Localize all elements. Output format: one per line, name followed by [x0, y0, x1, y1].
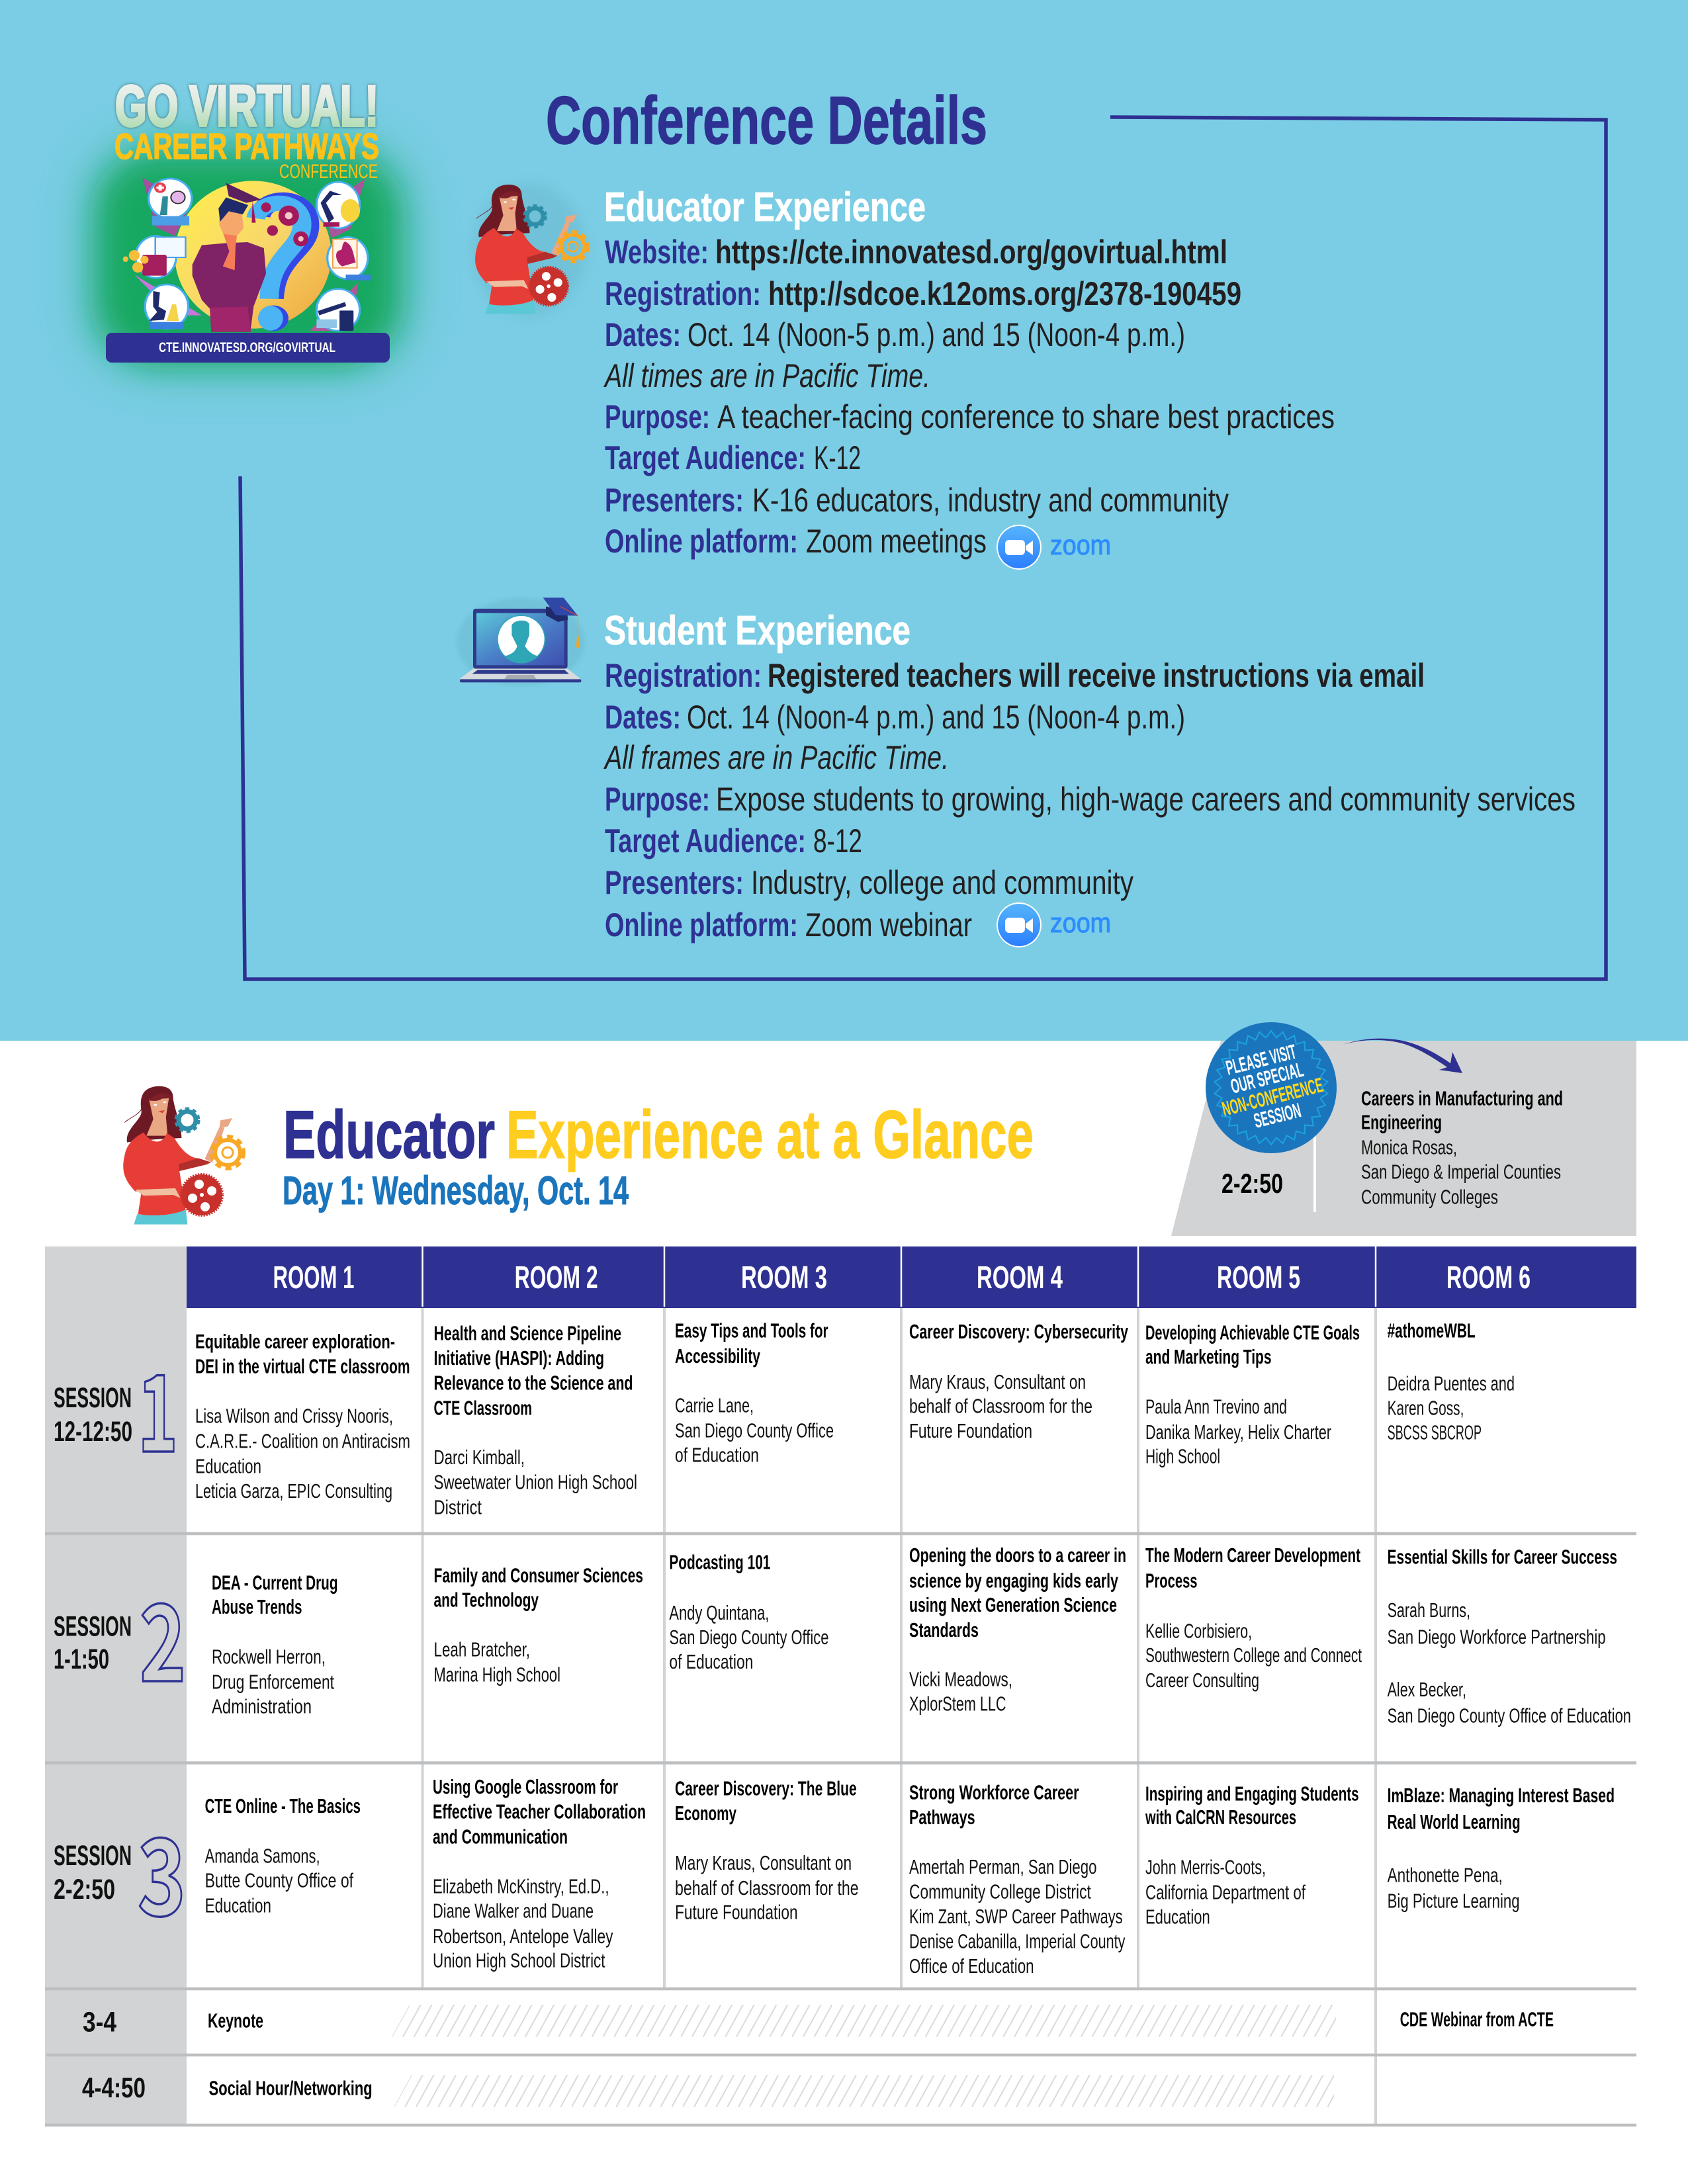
text block: student experience: Online platform: [605, 906, 798, 943]
text block: non-conference session details: Community Colleges [1361, 1186, 1498, 1208]
session 2 label: 1-1:50 [54, 1643, 109, 1675]
text block: non-conference session details: Monica Rosas, [1361, 1135, 1457, 1159]
session 2 room 2: and Technology [434, 1588, 539, 1612]
session 2 room 4: Vicki Meadows, [909, 1667, 1012, 1691]
session 3 label: 3 [138, 1793, 186, 1946]
heading: Educator Experience at a Glance [283, 1097, 1034, 1172]
session 2 room 6: Alex Becker, [1388, 1678, 1466, 1701]
session 3 room 2: and Communication [433, 1825, 568, 1849]
session 3 label: 2-2:50 [54, 1874, 115, 1905]
session 3 room 4: Pathways [909, 1806, 975, 1829]
frame: conference details outline [240, 117, 1606, 979]
session 1 room 2: Relevance to the Science and [434, 1371, 633, 1395]
session 3 room 2: Robertson, Antelope Valley [433, 1925, 613, 1948]
session 3 room 1 [205, 1794, 361, 1917]
session 2 room 4: science by engaging kids early [909, 1569, 1119, 1592]
session 3 room 6: Real World Learning [1388, 1810, 1521, 1833]
text block: student experience: Registration: [605, 657, 762, 694]
icon: woman with gears (educator) [473, 184, 588, 316]
session 1 label: 1 [138, 1329, 178, 1483]
badge: please visit: SESSION [1251, 1098, 1304, 1133]
session 2 room 5: Southwestern College and Connect [1145, 1643, 1362, 1667]
text block: educator experience: Presenters: [605, 482, 744, 519]
session 3 room 1: Butte County Office of [205, 1868, 353, 1892]
session 3 room 2: Elizabeth McKinstry, Ed.D., [433, 1875, 609, 1898]
keynote row: Keynote [208, 2009, 263, 2032]
session 3 room 4: Denise Cabanilla, Imperial County [909, 1929, 1126, 1953]
session 3 label [54, 1793, 186, 1946]
session 1 room 2: CTE Classroom [434, 1396, 532, 1420]
session 1 room 3: San Diego County Office [675, 1419, 834, 1442]
badge: please visit: PLEASE VISIT [1223, 1040, 1299, 1080]
session 3 room 2 [433, 1775, 646, 1972]
text block: educator experience: Target Audience: [605, 439, 806, 476]
session 2 room 3 [669, 1551, 828, 1673]
session 1 room 1: DEI in the virtual CTE classroom [195, 1355, 410, 1377]
panel: non-conference session [1171, 1022, 1636, 1236]
session 3 room 4: Community College District [909, 1880, 1091, 1903]
session 1 room 1: C.A.R.E.- Coalition on Antiracism [195, 1429, 410, 1453]
logo subtitle: Conference: CONFERENCE [279, 161, 378, 183]
icon: woman with gears (at a glance) [123, 1086, 244, 1225]
text block: non-conference session details: Engineering [1361, 1110, 1442, 1134]
session 1 room 3: Easy Tips and Tools for [675, 1319, 828, 1342]
session 1 room 5: Developing Achievable CTE Goals [1145, 1321, 1360, 1344]
logo subtitle: Career Pathways: CAREER PATHWAYS [114, 126, 379, 167]
session 1 room 1 [195, 1330, 410, 1503]
text block: student experience [603, 608, 1576, 943]
session 3 room 5: John Merris-Coots, [1145, 1855, 1266, 1879]
text block: educator experience: K-12 [814, 439, 861, 476]
header: room 4: ROOM 4 [977, 1260, 1063, 1295]
session 1 room 1: Equitable career exploration- [195, 1330, 395, 1353]
badge: please visit: NON-CONFERENCE [1220, 1073, 1325, 1121]
text block: educator experience: K-16 educators, industry and community [752, 482, 1229, 519]
session 2 room 6 [1388, 1546, 1631, 1727]
session 2 room 1: Abuse Trends [212, 1595, 302, 1618]
session 3 room 3: Mary Kraus, Consultant on [675, 1851, 852, 1874]
header: room 2: ROOM 2 [515, 1260, 598, 1295]
session 1 room 2: Sweetwater Union High School [434, 1470, 637, 1494]
session 2 label: SESSION [54, 1611, 132, 1643]
session 2 room 2 [434, 1564, 643, 1686]
session 2 room 4: using Next Generation Science [909, 1593, 1117, 1616]
arrow: to session [1343, 1039, 1462, 1073]
session 1 room 4: behalf of Classroom for the [909, 1395, 1092, 1417]
icon: laptop with graduate [457, 597, 584, 686]
text block: non-conference session details [1361, 1086, 1563, 1208]
session 2 room 3: Podcasting 101 [669, 1551, 770, 1573]
text block: non-conference session details: Careers in Manufacturing and [1361, 1086, 1563, 1110]
text block: educator experience: Oct. 14 (Noon-5 p.m.) and 15 (Noon-4 p.m.) [688, 316, 1185, 353]
text block: student experience: 8-12 [813, 822, 862, 859]
header: room 1: ROOM 1 [273, 1260, 355, 1295]
logo banner: CTE.INNOVATESD.ORG/GOVIRTUAL [159, 340, 335, 355]
session 2 room 5 [1145, 1544, 1362, 1692]
heading: Educator Experience at a Glance: Experience at a Glance [506, 1097, 1034, 1172]
header: room 6: ROOM 6 [1446, 1260, 1531, 1295]
text block: student experience: Registered teachers will receive instructions via email [768, 657, 1425, 694]
session 3 room 6: Big Picture Learning [1388, 1890, 1520, 1912]
icon: zoom logo (student): zoom [1050, 907, 1111, 938]
session 1 room 6: Karen Goss, [1388, 1396, 1464, 1420]
text block: educator experience: Online platform: [605, 523, 798, 560]
session 3 room 3: behalf of Classroom for the [675, 1876, 859, 1900]
session 2 room 4: Opening the doors to a career in [909, 1544, 1126, 1567]
session 2 room 1: Rockwell Herron, [212, 1645, 326, 1669]
header: room 3: ROOM 3 [741, 1260, 827, 1295]
session 2 room 2: Leah Bratcher, [434, 1638, 530, 1661]
session 2 room 3: of Education [669, 1650, 753, 1673]
session 1 label: SESSION [54, 1382, 132, 1414]
session 1 room 2: District [434, 1495, 482, 1519]
time: 2-2:50: 2-2:50 [1222, 1168, 1283, 1199]
session 2 room 5: Career Consulting [1145, 1669, 1259, 1692]
session 1 room 4: Future Foundation [909, 1419, 1032, 1442]
text block: student experience: Purpose: [605, 781, 710, 818]
text block: student experience: Dates: [605, 699, 681, 736]
session 1 label [54, 1329, 178, 1483]
session 2 room 4: XplorStem LLC [909, 1692, 1006, 1715]
session 3 room 1: CTE Online - The Basics [205, 1794, 361, 1817]
session 1 room 3 [675, 1319, 834, 1466]
session 3 room 6 [1388, 1784, 1615, 1912]
session 2 room 4 [909, 1544, 1126, 1715]
session 3 room 5: with CalCRN Resources [1145, 1806, 1296, 1829]
session 1 room 6: #athomeWBL [1388, 1319, 1476, 1342]
session 2 room 3: Andy Quintana, [669, 1601, 769, 1624]
session 3 room 3: Career Discovery: The Blue [675, 1777, 857, 1800]
session 3 room 4: Amertah Perman, San Diego [909, 1855, 1096, 1878]
text block: student experience: Zoom webinar [805, 906, 972, 943]
logo title: GO VIRTUAL!: GO VIRTUAL! [115, 74, 378, 138]
session 3 room 1: Amanda Samons, [205, 1845, 320, 1867]
session 2 room 1 [212, 1571, 337, 1718]
text block: educator experience: A teacher-facing conference to share best practices [717, 398, 1335, 435]
session 3 room 5 [1145, 1782, 1359, 1928]
session 3 room 4: Kim Zant, SWP Career Pathways [909, 1905, 1123, 1928]
session 2 room 6: San Diego Workforce Partnership [1388, 1625, 1606, 1649]
icon: zoom logo (educator): zoom [1050, 529, 1111, 560]
session 1 room 2: Health and Science Pipeline [434, 1322, 621, 1344]
session 2 label: 2 [140, 1559, 186, 1712]
text block: educator experience: Website: [605, 234, 709, 271]
session 3 room 5: Inspiring and Engaging Students [1145, 1782, 1359, 1805]
text block: student experience: All frames are in Pacific Time. [603, 739, 949, 776]
badge: please visit [1206, 1022, 1337, 1153]
session 3 room 4: Office of Education [909, 1954, 1034, 1978]
session 3 room 4 [909, 1781, 1126, 1978]
text block: educator experience: http://sdcoe.k12oms.org/2378-190459 [768, 275, 1241, 312]
panel: conference details background [0, 0, 1688, 1041]
session 2 room 2: Family and Consumer Sciences [434, 1564, 643, 1587]
session 2 room 2: Marina High School [434, 1663, 560, 1686]
session 1 room 5: Paula Ann Trevino and [1145, 1395, 1287, 1419]
session 2 label [54, 1559, 186, 1712]
icon: zoom logo (student) [997, 902, 1111, 947]
session 1 room 1: Lisa Wilson and Crissy Nooris, [195, 1404, 393, 1428]
title: Conference Details: Conference Details [546, 83, 987, 158]
session 1 room 2: Darci Kimball, [434, 1446, 525, 1469]
session 1 room 5: High School [1145, 1445, 1220, 1467]
session 2 room 1: Drug Enforcement [212, 1670, 334, 1694]
session 1 room 4: Career Discovery: Cybersecurity [909, 1320, 1129, 1343]
session 3 room 1: Education [205, 1894, 271, 1917]
session 3 room 2: Effective Teacher Collaboration [433, 1800, 646, 1823]
session 1 room 5: Danika Markey, Helix Charter [1145, 1420, 1331, 1444]
session 1 room 1: Education [195, 1454, 261, 1478]
text block: student experience: Target Audience: [605, 822, 806, 859]
icon: zoom logo (educator) [997, 525, 1111, 570]
session 2 room 1: DEA - Current Drug [212, 1571, 337, 1594]
heading: Educator Experience: Educator Experience [604, 185, 926, 230]
session 3 room 2: Using Google Classroom for [433, 1775, 618, 1798]
text block: non-conference session details: San Diego & Imperial Counties [1361, 1160, 1561, 1183]
session 1 room 6: SBCSS SBCROP [1388, 1421, 1482, 1444]
session 1 room 5: and Marketing Tips [1145, 1345, 1272, 1368]
hatch: keynote [392, 2005, 1336, 2037]
session 2 room 6: Sarah Burns, [1388, 1598, 1470, 1622]
text block: student experience: Industry, college and community [751, 864, 1133, 901]
session 1 room 3: Accessibility [675, 1344, 761, 1368]
session 1 room 2 [434, 1322, 637, 1519]
session 3 label: SESSION [54, 1840, 132, 1872]
header: room 5: ROOM 5 [1217, 1260, 1300, 1295]
text block: student experience: Oct. 14 (Noon-4 p.m.) and 15 (Noon-4 p.m.) [687, 699, 1185, 736]
heading: Student Experience: Student Experience [604, 608, 911, 654]
session 2 room 5: Kellie Corbisiero, [1145, 1620, 1252, 1642]
session 1 room 1: Leticia Garza, EPIC Consulting [195, 1479, 392, 1503]
session 1 room 3: of Education [675, 1444, 759, 1466]
session 3 room 4: Strong Workforce Career [909, 1781, 1079, 1804]
badge: please visit: OUR SPECIAL [1228, 1058, 1306, 1098]
session 3 room 3: Future Foundation [675, 1900, 798, 1924]
session 3 room 2: Union High School District [433, 1949, 605, 1972]
time label: 4-4:50: 4-4:50 [82, 2072, 146, 2104]
session 1 room 3: Carrie Lane, [675, 1393, 754, 1417]
heading: Educator Experience at a Glance: Educator [283, 1097, 495, 1172]
session 3 room 2: Diane Walker and Duane [433, 1899, 594, 1923]
session 1 room 2: Initiative (HASPI): Adding [434, 1346, 604, 1370]
text block: educator experience: Zoom meetings [806, 523, 987, 560]
session 2 room 4: Standards [909, 1618, 979, 1641]
session 1 room 4 [909, 1320, 1129, 1442]
session 1 label: 12-12:50 [54, 1416, 132, 1448]
CDE webinar: CDE Webinar from ACTE [1400, 2007, 1554, 2031]
session 3 room 5: Education [1145, 1905, 1210, 1928]
text block: educator experience: https://cte.innovatesd.org/govirtual.html [715, 234, 1227, 271]
session 2 room 5: The Modern Career Development [1145, 1544, 1360, 1567]
session 1 room 4: Mary Kraus, Consultant on [909, 1370, 1086, 1393]
session 2 room 5: Process [1145, 1569, 1198, 1592]
session 3 room 3: Economy [675, 1802, 737, 1825]
subheading: Day 1: Day 1: Wednesday, Oct. 14 [283, 1168, 629, 1213]
session 2 room 3: San Diego County Office [669, 1626, 828, 1649]
logo banner [106, 333, 390, 363]
social hour row: Social Hour/Networking [209, 2076, 373, 2100]
session 2 room 1: Administration [212, 1695, 312, 1718]
text block: educator experience: Dates: [605, 316, 681, 353]
text block: educator experience: Purpose: [605, 398, 710, 435]
session 1 room 6: Deidra Puentes and [1388, 1372, 1515, 1395]
session 1 room 6 [1388, 1319, 1515, 1444]
panel: schedule table [45, 1246, 1636, 2126]
session 1 room 5 [1145, 1321, 1360, 1467]
session 3 room 6: Anthonette Pena, [1388, 1863, 1503, 1887]
text block: educator experience: All times are in Pacific Time. [603, 357, 930, 394]
text block: student experience: Presenters: [605, 864, 744, 901]
hatch: social hour [394, 2075, 1334, 2107]
logo: Go Virtual Career Pathways Conference [83, 74, 414, 377]
time label: 3-4: 3-4 [83, 2006, 116, 2038]
session 3 room 3 [675, 1777, 859, 1924]
session 3 room 5: California Department of [1145, 1880, 1306, 1904]
text block: educator experience [603, 185, 1335, 560]
text block: educator experience: Registration: [605, 275, 761, 312]
